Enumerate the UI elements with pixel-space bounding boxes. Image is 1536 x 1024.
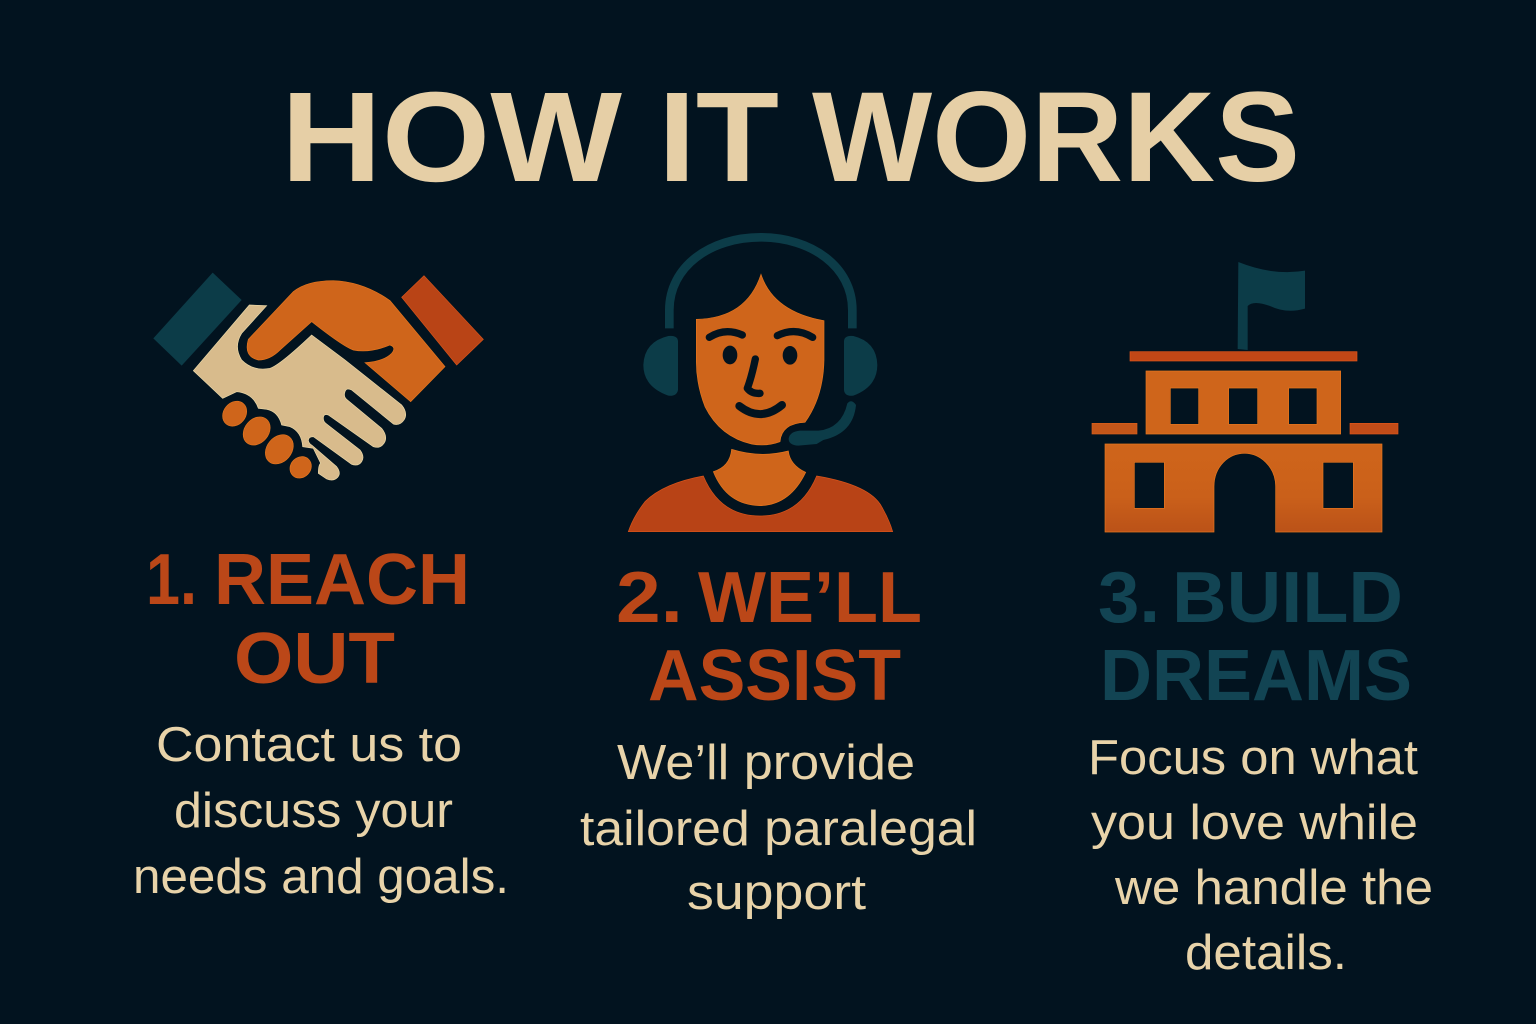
heading: 2. we'll assist	[616, 558, 922, 716]
heading: 3. build dreams	[1098, 558, 1412, 716]
title: HOW	[281, 66, 622, 209]
panel: step 2 we'll assist	[580, 237, 977, 920]
heading: 1. reach out	[146, 540, 470, 699]
heading: 3. build dreams: 3.	[1098, 558, 1160, 638]
heading: 3. build dreams: DREAMS	[1100, 636, 1412, 716]
panel: step 1 reach out	[133, 273, 509, 904]
text: step 2 description	[580, 736, 977, 920]
heading: 3. build dreams: BUILD	[1172, 558, 1403, 638]
text: step 2 description: tailored paralegal	[580, 802, 977, 856]
heading: 1. reach out: 1.	[146, 540, 197, 620]
panel: step 3 build dreams	[1088, 262, 1433, 980]
text: step 3 description	[1088, 731, 1433, 980]
title: WORKS	[812, 66, 1300, 209]
title: IT	[658, 66, 779, 209]
text: step 1 description	[133, 718, 509, 904]
text: step 2 description: support	[687, 866, 866, 920]
icon: headset agent	[628, 237, 893, 532]
text: step 1 description: discuss your	[174, 784, 453, 838]
title	[281, 66, 1300, 209]
icon: building with flag	[1092, 262, 1398, 532]
text: step 1 description: needs and goals.	[133, 850, 509, 904]
heading: 2. we'll assist: ASSIST	[648, 636, 901, 716]
icon: handshake	[153, 273, 483, 482]
text: step 2 description: We’ll provide	[617, 736, 915, 790]
text: step 3 description: Focus on what	[1088, 731, 1418, 785]
text: step 3 description: details.	[1185, 926, 1347, 980]
text: step 1 description: Contact us to	[156, 718, 462, 772]
text: step 3 description: you love while	[1091, 796, 1418, 850]
text: step 3 description: we handle the	[1114, 861, 1433, 915]
heading: 1. reach out: REACH	[214, 540, 470, 620]
heading: 2. we'll assist: WE’LL	[698, 558, 922, 638]
heading: 2. we'll assist: 2.	[616, 558, 683, 638]
heading: 1. reach out: OUT	[234, 619, 395, 699]
